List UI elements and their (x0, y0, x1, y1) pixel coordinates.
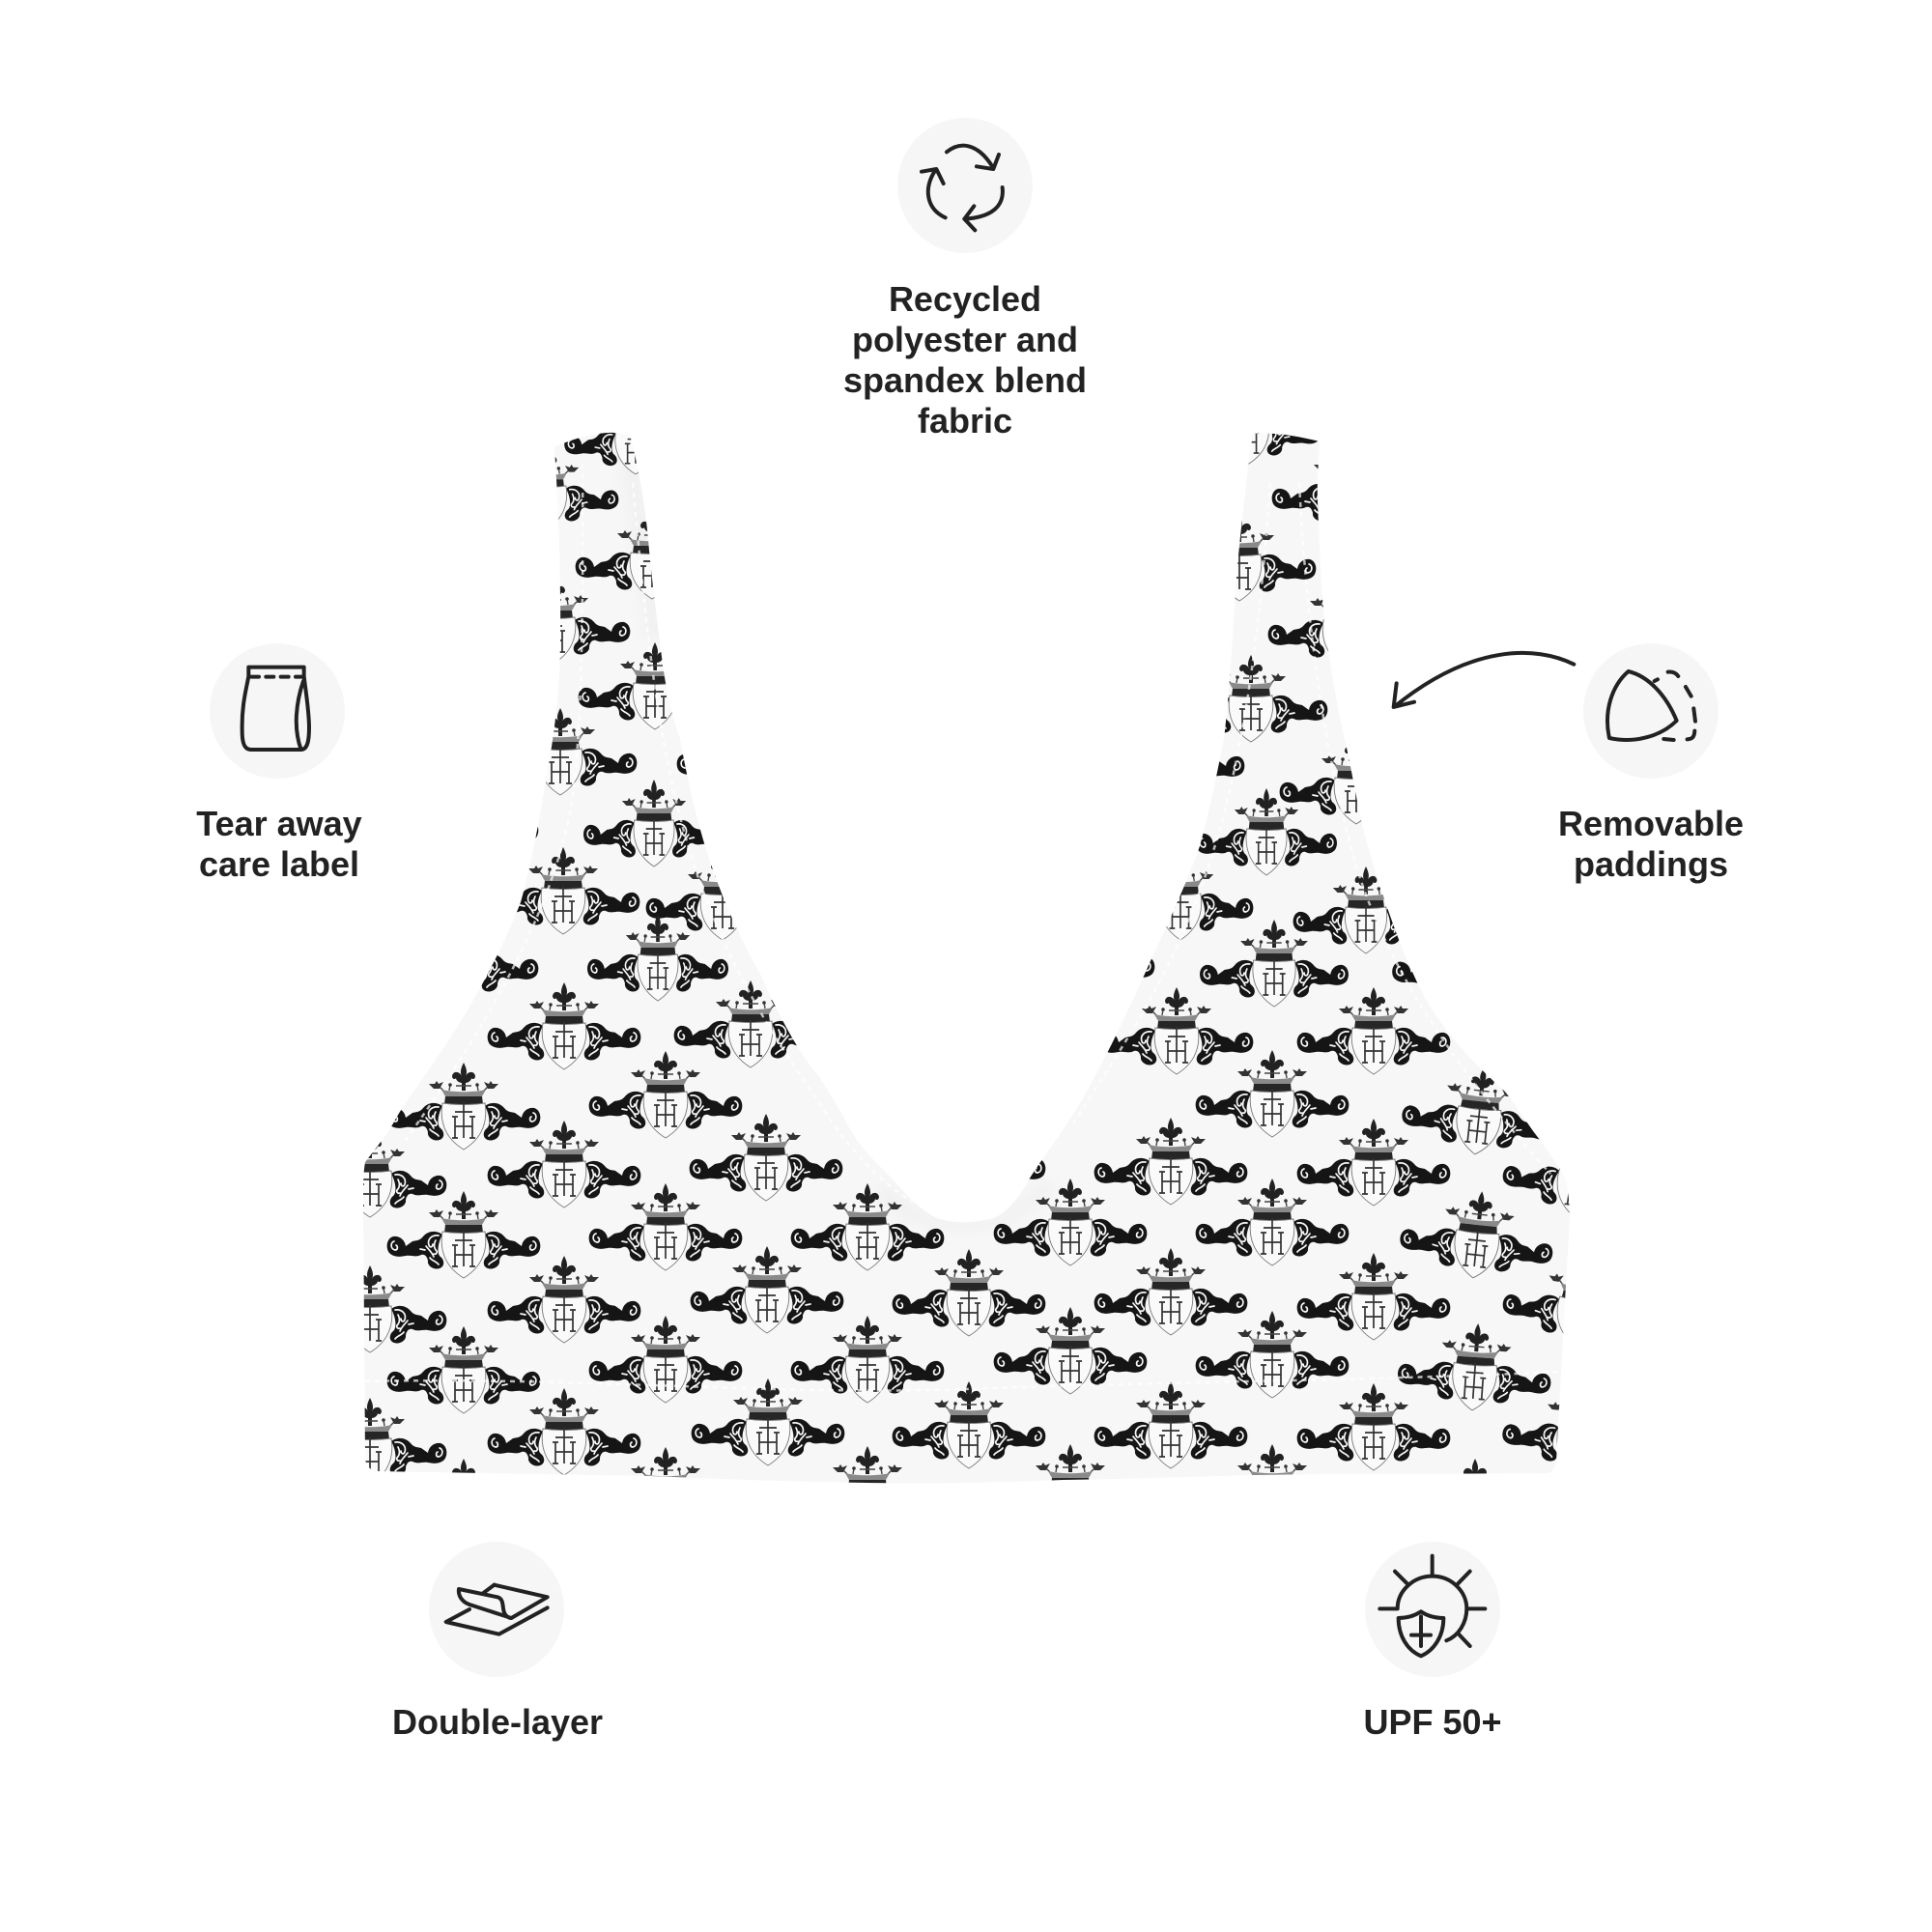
label: recycled fabric: polyester and (852, 320, 1078, 359)
label: tear away care label: care label (199, 844, 359, 884)
label: double-layer: Double-layer (392, 1702, 603, 1742)
icon circle: double-layer (429, 1542, 564, 1677)
fabric base (348, 425, 1584, 1488)
icon circle: care label (210, 643, 345, 779)
feature: removable paddings (1394, 643, 1744, 884)
feature: double-layer (392, 1542, 603, 1742)
icon: care label (242, 668, 309, 750)
seam stitches (365, 464, 1560, 1391)
icon circle: UPF (1365, 1542, 1500, 1677)
icon circle: paddings (1583, 643, 1719, 779)
icon: layered sheets (446, 1585, 548, 1634)
feature: UPF 50+ (1363, 1542, 1502, 1742)
label: recycled fabric: Recycled (889, 279, 1041, 319)
feature: tear away care label (196, 643, 362, 884)
label: tear away care label: Tear away (196, 804, 362, 843)
label: removable paddings: Removable (1558, 804, 1744, 843)
label: recycled fabric: fabric (918, 401, 1012, 440)
feature: recycled fabric (843, 118, 1087, 440)
garment: patterned bikini top (363, 433, 1570, 1484)
icon: padding shape (1607, 671, 1695, 740)
icon: sun and shield (1379, 1556, 1485, 1656)
label: UPF 50+: UPF 50+ (1363, 1702, 1502, 1742)
arrow: to strap (1394, 653, 1574, 707)
icon circle: recycle (897, 118, 1033, 253)
fabric shading (618, 440, 1053, 1230)
label: removable paddings: paddings (1574, 844, 1728, 884)
label: recycled fabric: spandex blend (843, 360, 1087, 400)
fabric pattern: crest motifs (294, 382, 1662, 1546)
icon: recycle arrows (922, 146, 1003, 230)
